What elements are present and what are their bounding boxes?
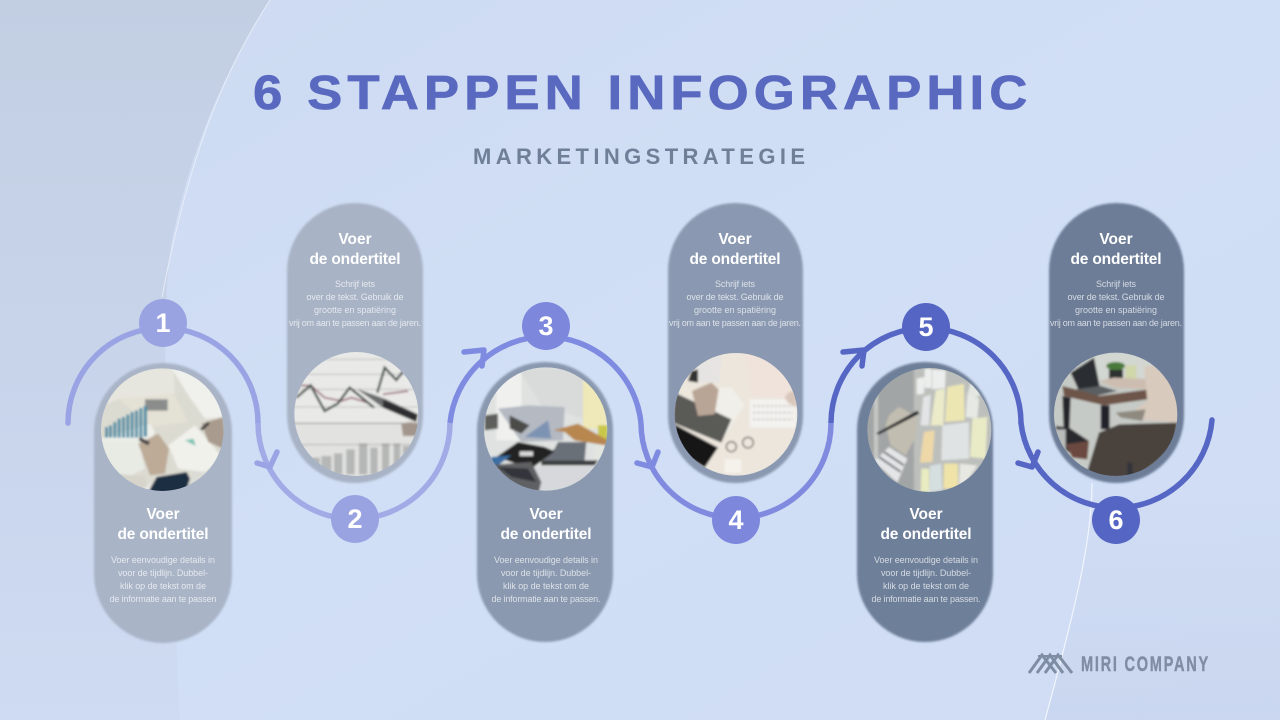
body text: voor de tijdlijn. Dubbel- [501, 568, 591, 578]
panel: step 3 [477, 362, 613, 642]
panel: step 2 [287, 203, 423, 483]
number badge 5 [902, 303, 950, 351]
body text: vrij om aan te passen aan de jaren. [669, 318, 801, 328]
body text: Schrijf iets [335, 279, 376, 289]
arrow: into step 4 [637, 452, 658, 467]
photo: business charts on desk [101, 368, 224, 491]
body text: Voer eenvoudige details in [874, 555, 978, 565]
panel: step 6 [1049, 203, 1184, 483]
arrow: into step 6 [1018, 452, 1038, 467]
body text [492, 555, 600, 604]
body text: Schrijf iets [1096, 279, 1136, 289]
heading: Voer [338, 231, 372, 248]
body text: de informatie aan te passen. [872, 594, 980, 604]
heading: Voer [529, 506, 563, 523]
number badge 1 [139, 299, 187, 347]
body text: voor de tijdlijn. Dubbel- [118, 568, 208, 578]
number badge 2 [331, 495, 379, 543]
connector: segment 2 [258, 423, 450, 519]
heading: Voer [718, 231, 752, 248]
number badge 4 [712, 496, 760, 544]
number badge 6 [1092, 496, 1140, 544]
body text [1050, 279, 1182, 328]
heading: de ondertitel [500, 526, 592, 543]
panel: step 4 [668, 203, 803, 483]
heading [880, 506, 972, 543]
arrow: into step 5 [843, 350, 864, 366]
heading: de ondertitel [118, 526, 208, 543]
arrow: into step 2 [257, 452, 277, 467]
icon: mountain mark [1029, 655, 1072, 673]
body text: Schrijf iets [715, 279, 756, 289]
heading: Voer [1099, 231, 1133, 248]
logo: Miri Company [1029, 653, 1210, 676]
body text: de informatie aan te passen [110, 594, 216, 604]
photo: laptop and keyboard from above [674, 353, 798, 476]
body text: vrij om aan te passen aan de jaren. [289, 318, 421, 328]
number badge 5: 5 [918, 312, 934, 342]
connector: segment 5 [831, 328, 1021, 423]
heading [1070, 231, 1162, 268]
heading [500, 506, 592, 543]
heading: de ondertitel [310, 251, 400, 268]
body text: vrij om aan te passen aan de jaren. [1050, 318, 1182, 328]
heading [690, 231, 780, 268]
heading: de ondertitel [880, 526, 972, 543]
photo: presenting a report at a laptop [484, 367, 608, 491]
heading: Voer [909, 506, 943, 523]
body text: over de tekst. Gebruik de [1068, 292, 1164, 302]
body text: grootte en spatiëring [694, 305, 776, 315]
body text: klik op de tekst om de [503, 581, 589, 591]
number badge 1: 1 [155, 308, 171, 338]
subtitle: MARKETINGSTRATEGIE [473, 144, 805, 169]
arrow: into step 3 [464, 350, 484, 366]
body text: voor de tijdlijn. Dubbel- [881, 568, 971, 578]
body text [872, 555, 980, 604]
body text: grootte en spatiëring [314, 305, 396, 315]
title: 6 STAPPEN INFOGRAPHIC [253, 65, 1027, 119]
number badge 6: 6 [1108, 505, 1124, 535]
connector: segment 6 [1021, 420, 1212, 508]
number badge 3 [522, 302, 570, 350]
heading [310, 231, 400, 268]
body text [669, 279, 801, 328]
body text: over de tekst. Gebruik de [306, 292, 404, 302]
panel: step 5 [857, 362, 999, 642]
body text: de informatie aan te passen. [492, 594, 600, 604]
number badge 3: 3 [538, 311, 554, 341]
connector: segment 4 [641, 423, 831, 518]
body text: grootte en spatiëring [1075, 305, 1157, 315]
heading: de ondertitel [1070, 251, 1162, 268]
photo: line chart with pen [294, 352, 418, 476]
heading [118, 506, 208, 543]
body text: Voer eenvoudige details in [111, 555, 215, 565]
body text: klik op de tekst om de [120, 581, 206, 591]
company name: MIRI COMPANY [1081, 653, 1210, 676]
body text [289, 279, 421, 328]
heading: Voer [146, 506, 180, 523]
body text: Voer eenvoudige details in [494, 555, 598, 565]
panel: step 1 [94, 362, 232, 643]
body text: klik op de tekst om de [883, 581, 969, 591]
photo: person working at laptop table [1054, 352, 1178, 476]
connector: segment 3 [450, 337, 641, 423]
body text [110, 555, 216, 604]
heading: de ondertitel [690, 251, 780, 268]
number badge 2: 2 [347, 504, 363, 534]
connector: segment 1 [68, 328, 258, 423]
body text: over de tekst. Gebruik de [686, 292, 784, 302]
number badge 4: 4 [728, 505, 744, 535]
photo: hand writing on sticky notes [867, 368, 992, 492]
